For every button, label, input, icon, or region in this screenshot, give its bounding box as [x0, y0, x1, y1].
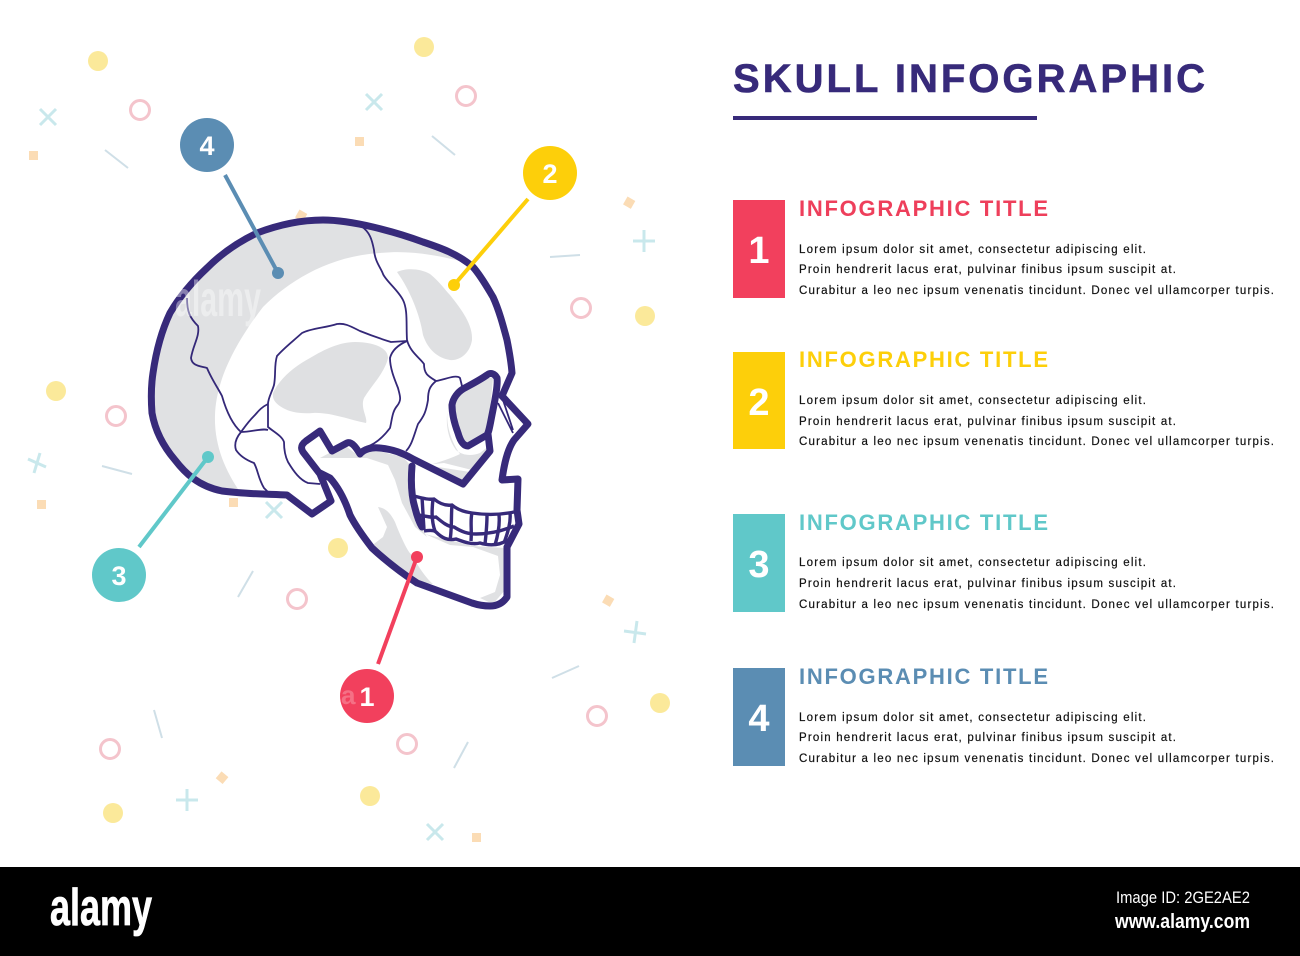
- panel: item 1: 1: [748, 230, 770, 272]
- panel: item 4: INFOGRAPHIC TITLE: [799, 664, 1048, 689]
- footer bar: www.alamy.com: [1114, 911, 1250, 933]
- panel: item 3: Proin hendrerit lacus erat, pulvinar finibus ipsum suscipit at.: [799, 578, 1176, 590]
- skull illustration: [151, 220, 528, 606]
- marker 4: 4: [199, 131, 215, 161]
- panel: item 2: Curabitur a leo nec ipsum venenatis tincidunt. Donec vel ullamcorper turpis.: [799, 436, 1274, 448]
- panel: item 2: Lorem ipsum dolor sit amet, consectetur adipiscing elit.: [799, 395, 1146, 407]
- panel: item 1: Curabitur a leo nec ipsum venenatis tincidunt. Donec vel ullamcorper turpis.: [799, 285, 1274, 297]
- marker 3: 3: [111, 561, 127, 591]
- below teeth grey shading: [425, 534, 507, 604]
- panel: item 2: Proin hendrerit lacus erat, pulvinar finibus ipsum suscipit at.: [799, 416, 1176, 428]
- panel: item 4: 4: [748, 698, 770, 740]
- panel: item 4: Lorem ipsum dolor sit amet, consectetur adipiscing elit.: [799, 712, 1146, 724]
- cheek grey shading: [273, 342, 388, 423]
- panel: item 3: 3: [748, 544, 770, 586]
- panel: item 4: Proin hendrerit lacus erat, pulvinar finibus ipsum suscipit at.: [799, 732, 1176, 744]
- marker 1: 1: [359, 682, 375, 712]
- marker 2: 2: [542, 159, 558, 189]
- marker 4: [180, 118, 284, 279]
- sutures: [187, 226, 513, 492]
- panel: item 2: INFOGRAPHIC TITLE: [799, 347, 1048, 372]
- marker 2: [448, 146, 577, 291]
- panel: item 2: 2: [748, 382, 770, 424]
- panel: item 3: Curabitur a leo nec ipsum venenatis tincidunt. Donec vel ullamcorper turpis.: [799, 599, 1274, 611]
- marker 3: [92, 451, 214, 602]
- panel: item 1: INFOGRAPHIC TITLE: [799, 196, 1048, 221]
- panel: item 2: [733, 347, 1274, 449]
- jaw corner grey shading: [370, 507, 433, 584]
- panel: item 4: Curabitur a leo nec ipsum venenatis tincidunt. Donec vel ullamcorper turpis.: [799, 753, 1274, 765]
- cranium grey shading: [151, 220, 465, 492]
- title: SKULL INFOGRAPHIC: [733, 57, 1205, 101]
- footer bar: [0, 867, 1300, 956]
- arch and ramus grey shading: [320, 447, 427, 537]
- skull outline: [151, 220, 528, 606]
- panel: item 3: [733, 510, 1274, 612]
- panel: item 1: Proin hendrerit lacus erat, pulvinar finibus ipsum suscipit at.: [799, 264, 1176, 276]
- panel: item 3: Lorem ipsum dolor sit amet, consectetur adipiscing elit.: [799, 557, 1146, 569]
- footer bar: alamy: [50, 879, 152, 937]
- footer bar: Image ID: 2GE2AE2: [1116, 888, 1250, 907]
- panel: item 3: INFOGRAPHIC TITLE: [799, 510, 1048, 535]
- marker 1: [340, 551, 423, 723]
- panel: item 1: [733, 196, 1274, 298]
- temporal grey shading: [397, 269, 472, 360]
- orbit grey shading: [425, 378, 493, 484]
- marker 1: a: [341, 680, 356, 710]
- watermark: alamy: [175, 271, 261, 327]
- panel: item 1: Lorem ipsum dolor sit amet, consectetur adipiscing elit.: [799, 244, 1146, 256]
- title: [733, 57, 1205, 120]
- teeth: [414, 496, 514, 545]
- panel: item 4: [733, 664, 1274, 766]
